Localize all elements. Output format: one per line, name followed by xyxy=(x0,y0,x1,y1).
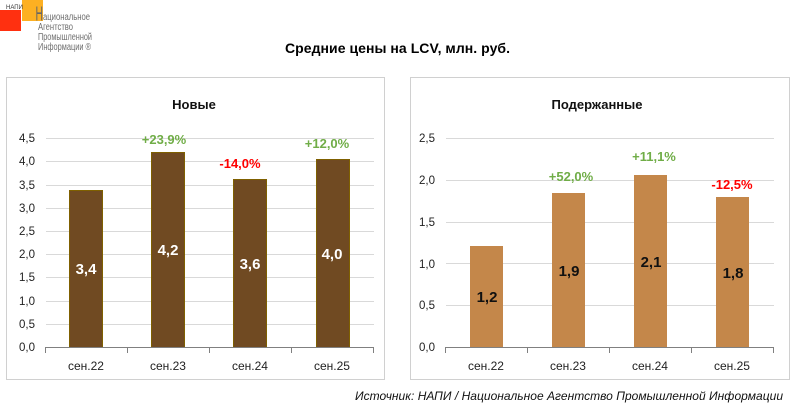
bar: сен.23 new xyxy=(152,152,184,348)
heading: new: Новые xyxy=(172,97,216,112)
x axis used: сен.23 xyxy=(550,359,586,373)
logo: Промышленной xyxy=(38,32,92,43)
gridlines and y axis labels xyxy=(419,133,774,354)
bar: сен.24 used: 2,1 xyxy=(641,254,661,271)
x axis new: сен.24 xyxy=(232,359,268,373)
x axis used xyxy=(446,348,774,373)
bar: сен.25 used: 1,8 xyxy=(723,265,743,282)
change labels new: +23,9% xyxy=(142,132,187,147)
logo: ациональное xyxy=(43,12,90,23)
bar: сен.23 used xyxy=(552,193,585,347)
gridlines and y axis labels: 1,5 xyxy=(419,217,435,229)
logo xyxy=(0,0,92,53)
change labels new xyxy=(142,132,350,171)
gridlines and y axis labels: 2,5 xyxy=(419,133,435,145)
gridlines and y axis labels xyxy=(19,133,374,354)
gridlines and y axis labels: 0,5 xyxy=(419,300,435,312)
gridlines and y axis labels: 0,0 xyxy=(419,342,435,354)
bar: сен.23 new: 4,2 xyxy=(158,242,178,259)
change labels used xyxy=(549,149,753,192)
gridlines and y axis labels: 0,5 xyxy=(19,319,35,331)
logo: Н xyxy=(36,4,43,26)
panel: used vehicles xyxy=(410,78,790,380)
bar: сен.22 used xyxy=(470,246,503,347)
gridlines and y axis labels: 1,0 xyxy=(19,296,35,308)
change labels new: +12,0% xyxy=(305,136,350,151)
bar: сен.25 used xyxy=(716,197,749,347)
gridlines and y axis labels: 1,5 xyxy=(19,272,35,284)
bar: сен.23 used: 1,9 xyxy=(559,263,579,280)
change labels used: +11,1% xyxy=(632,149,676,164)
gridlines and y axis labels: 3,5 xyxy=(19,180,35,192)
x axis used: сен.25 xyxy=(714,359,750,373)
bar: сен.22 used: 1,2 xyxy=(477,289,497,306)
gridlines and y axis labels: 2,0 xyxy=(419,175,435,187)
bar: сен.22 new: 3,4 xyxy=(76,261,97,278)
bar: сен.24 new xyxy=(234,180,266,348)
gridlines and y axis labels: 1,0 xyxy=(419,259,435,271)
gridlines and y axis labels: 0,0 xyxy=(19,342,35,354)
change labels used: -12,5% xyxy=(711,177,753,192)
bar: сен.24 new: 3,6 xyxy=(240,256,260,273)
gridlines and y axis labels: 4,5 xyxy=(19,133,35,145)
logo: Агентство xyxy=(38,22,73,33)
x axis used: сен.22 xyxy=(468,359,504,373)
gridlines and y axis labels: 4,0 xyxy=(19,156,35,168)
change labels used: +52,0% xyxy=(549,169,594,184)
bar: сен.25 new: 4,0 xyxy=(322,246,342,263)
gridlines and y axis labels: 3,0 xyxy=(19,203,35,215)
bar: сен.25 new xyxy=(316,160,350,348)
x axis new xyxy=(46,348,374,373)
change labels new: -14,0% xyxy=(219,156,261,171)
source note: Источник: НАПИ / Национальное Агентство Промышленной Информации xyxy=(355,389,783,403)
x axis new: сен.25 xyxy=(314,359,350,373)
gridlines and y axis labels: 2,0 xyxy=(19,249,35,261)
panel: new vehicles xyxy=(6,78,384,380)
x axis used: сен.24 xyxy=(632,359,668,373)
gridlines and y axis labels: 2,5 xyxy=(19,226,35,238)
logo: Информации ® xyxy=(38,41,91,53)
heading: used: Подержанные xyxy=(551,97,643,112)
bar: сен.22 new xyxy=(70,190,102,348)
logo: НАПИ xyxy=(6,5,23,11)
main title: Средние цены на LCV, млн. руб. xyxy=(285,40,510,56)
x axis new: сен.23 xyxy=(150,359,186,373)
bar: сен.24 used xyxy=(634,175,667,347)
x axis new: сен.22 xyxy=(68,359,104,373)
